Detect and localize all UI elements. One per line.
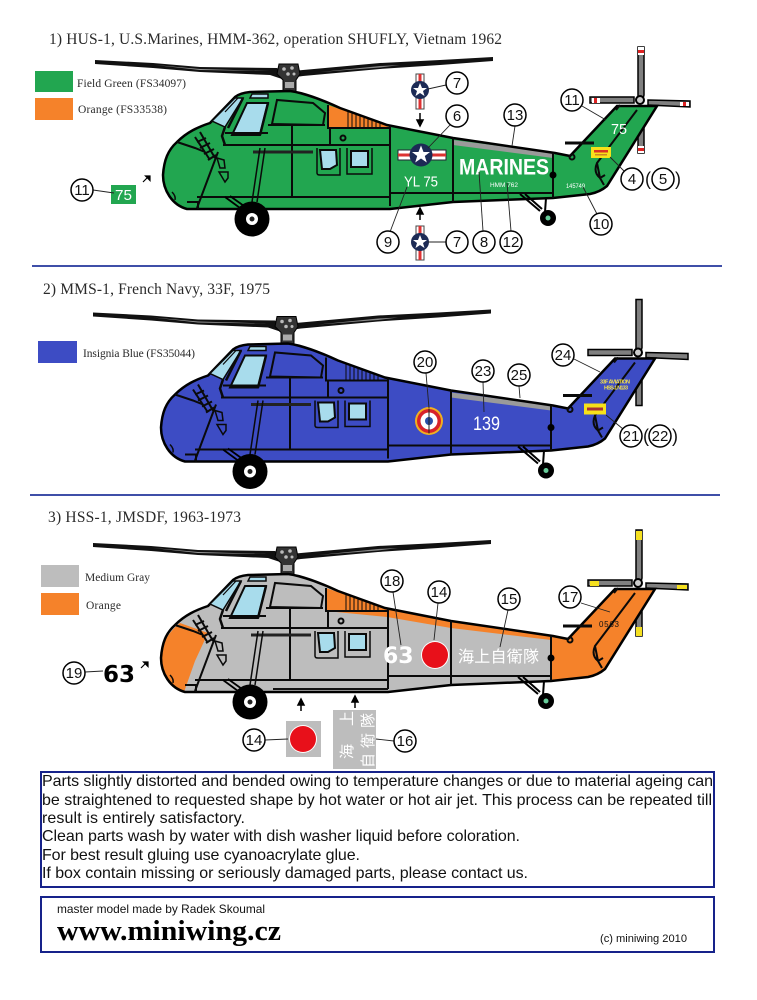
- legend: scheme 3 colours: Medium Gray: [85, 572, 150, 584]
- marking: aviation text: HSS-1 N133: [604, 386, 628, 392]
- arrow: up from lower roundel: [417, 208, 423, 220]
- arrow: up to kanji: [352, 696, 358, 708]
- panel: instructions: be straightened to requested shape by hot water or hot air jet. This process can be repeated till: [42, 792, 712, 809]
- helicopter 1: green USMC HUS-1: [95, 47, 690, 236]
- roundel: upper surface: [411, 74, 429, 109]
- callout 17: 17: [562, 589, 578, 606]
- panel: credits: (c) miniwing 2010: [600, 933, 687, 945]
- legend: scheme 2 colour: [38, 341, 195, 363]
- callout 12: 12: [503, 234, 519, 251]
- callout 13: 13: [507, 107, 523, 124]
- panel: credits: master model made by Radek Skoumal: [57, 902, 265, 916]
- helicopter 3: grey and orange JMSDF: [93, 530, 688, 720]
- callout 11 nose: [71, 179, 114, 201]
- title: scheme 3: 3) HSS-1, JMSDF, 1963-1973: [48, 509, 241, 526]
- callout 18: [381, 570, 403, 645]
- callout 14 on fuselage: 14: [431, 584, 447, 601]
- callout 10: 10: [593, 216, 609, 233]
- callout 19: [63, 662, 103, 684]
- panel: instructions: [41, 772, 714, 887]
- callout 4: 4: [628, 171, 636, 188]
- callout 4: [610, 157, 643, 190]
- roundel: star and bars on fuselage: [398, 144, 446, 166]
- callout 24: [552, 344, 600, 372]
- panel: instructions: For best result gluing use cyanoacrylate glue.: [42, 847, 360, 864]
- marking: tail 75: 75: [611, 121, 627, 138]
- legend: scheme 1 colours: Orange (FS33538): [78, 104, 167, 116]
- callout 21: [606, 415, 642, 447]
- marking: MARINES: MARINES: [459, 154, 549, 180]
- callout 12: [500, 183, 522, 253]
- panel: credits: [41, 897, 714, 952]
- callout 6: [428, 105, 468, 148]
- callout 17: [559, 586, 610, 612]
- legend: scheme 2 colour: Insignia Blue (FS35044): [83, 348, 195, 360]
- title: scheme 1: 1) HUS-1, U.S.Marines, HMM-362, operation SHUFLY, Vietnam 1962: [49, 31, 502, 48]
- callout 23: 23: [475, 363, 491, 380]
- callout 7 upper: [428, 72, 468, 94]
- legend: scheme 3 colours: Orange: [86, 600, 121, 612]
- callout 11 tail: [561, 89, 606, 120]
- legend: scheme 1 colours: Field Green (FS34097): [77, 78, 186, 90]
- marking: HMM 762: HMM 762: [490, 182, 518, 189]
- panel: instructions: Clean parts wash by water with dish washer liquid before coloration.: [42, 828, 520, 845]
- roundel: lower surface: [411, 226, 429, 260]
- callout 25: 25: [511, 367, 527, 384]
- marking: 139: 139: [473, 414, 500, 435]
- callout 15: [498, 588, 520, 647]
- callout 24: 24: [555, 347, 571, 364]
- legend: scheme 1 colours: [35, 71, 186, 120]
- arrow: to nose number: [141, 662, 148, 668]
- marking: 0563: 0563: [599, 620, 620, 629]
- roundel: French cockade: [415, 407, 443, 435]
- callout 10: [583, 187, 612, 235]
- marking: YL 75: YL 75: [404, 174, 438, 190]
- panel: instructions: result is entirely satisfactory.: [42, 810, 245, 827]
- decal: nose number 75: 75: [115, 188, 132, 204]
- marking: aviation text: [600, 380, 630, 392]
- callout 7 lower: 7: [453, 234, 461, 251]
- callout 22 in brackets: [643, 425, 678, 447]
- callout 25: [508, 364, 530, 398]
- decal: black 63: 63: [103, 662, 135, 688]
- marking: aviation text: 33F AVIATION: [600, 380, 630, 386]
- callout 5 in brackets: (: [645, 169, 651, 189]
- title: scheme 2: 2) MMS-1, French Navy, 33F, 1975: [43, 281, 270, 298]
- decal: vertical kanji on grey: 海 上: [339, 711, 356, 759]
- callout 21: 21: [623, 428, 639, 445]
- callout 22 in brackets: 22: [652, 428, 668, 445]
- callout 23: [472, 360, 494, 412]
- marking: serial: 145749: [566, 184, 586, 190]
- decal: vertical kanji on grey: 自衛隊: [360, 713, 377, 768]
- callout 5 in brackets: [645, 168, 681, 190]
- decal: hinomaru on grey: [286, 721, 321, 757]
- marking: white kanji: 海上自衛隊: [458, 648, 539, 666]
- helicopter 2: blue French Navy: [93, 300, 688, 489]
- callout 16: 16: [397, 733, 413, 750]
- callout 13: [504, 104, 526, 146]
- callout 9: [377, 187, 407, 253]
- callout 14 on fuselage: [428, 581, 450, 640]
- callout 14 lower: 14: [246, 732, 262, 749]
- callout 15: 15: [501, 591, 517, 608]
- callout 19: 19: [66, 665, 82, 682]
- panel: instructions: Parts slightly distorted and bended owing to temperature changes or due to material ageing can: [42, 773, 713, 790]
- callout 8: 8: [480, 234, 488, 251]
- marking: red disc: [421, 641, 449, 669]
- arrow: down to upper roundel: [417, 113, 423, 126]
- arrow: up to hinomaru: [298, 699, 304, 711]
- decal: nose number 75: [111, 185, 136, 204]
- decal: vertical kanji on grey: [333, 710, 377, 769]
- callout 22 in brackets: (: [643, 426, 649, 446]
- callout 7 upper: 7: [453, 75, 461, 92]
- callout 8: [473, 172, 495, 253]
- callout 16: [376, 730, 416, 752]
- callout 7 lower: [428, 231, 468, 253]
- callout 14 lower: [243, 729, 288, 751]
- callout 18: 18: [384, 573, 400, 590]
- callout 11 nose: 11: [74, 182, 90, 199]
- callout 9: 9: [384, 234, 392, 251]
- callout 11 tail: 11: [564, 92, 580, 109]
- marking: white 63: 63: [383, 644, 414, 669]
- callout 22 in brackets: ): [672, 426, 678, 446]
- callout 5 in brackets: 5: [659, 171, 667, 188]
- panel: credits: www.miniwing.cz: [57, 915, 281, 947]
- callout 20: [414, 351, 436, 408]
- callout 20: 20: [417, 354, 433, 371]
- callout 5 in brackets: ): [675, 169, 681, 189]
- panel: instructions: If box contain missing or seriously damaged parts, please contact us.: [42, 865, 528, 882]
- legend: scheme 3 colours: [41, 565, 150, 615]
- decal: yellow warning: [584, 404, 606, 414]
- callout 6: 6: [453, 108, 461, 125]
- arrow: to nose number: [143, 176, 150, 182]
- decal: yellow warning: [591, 147, 611, 158]
